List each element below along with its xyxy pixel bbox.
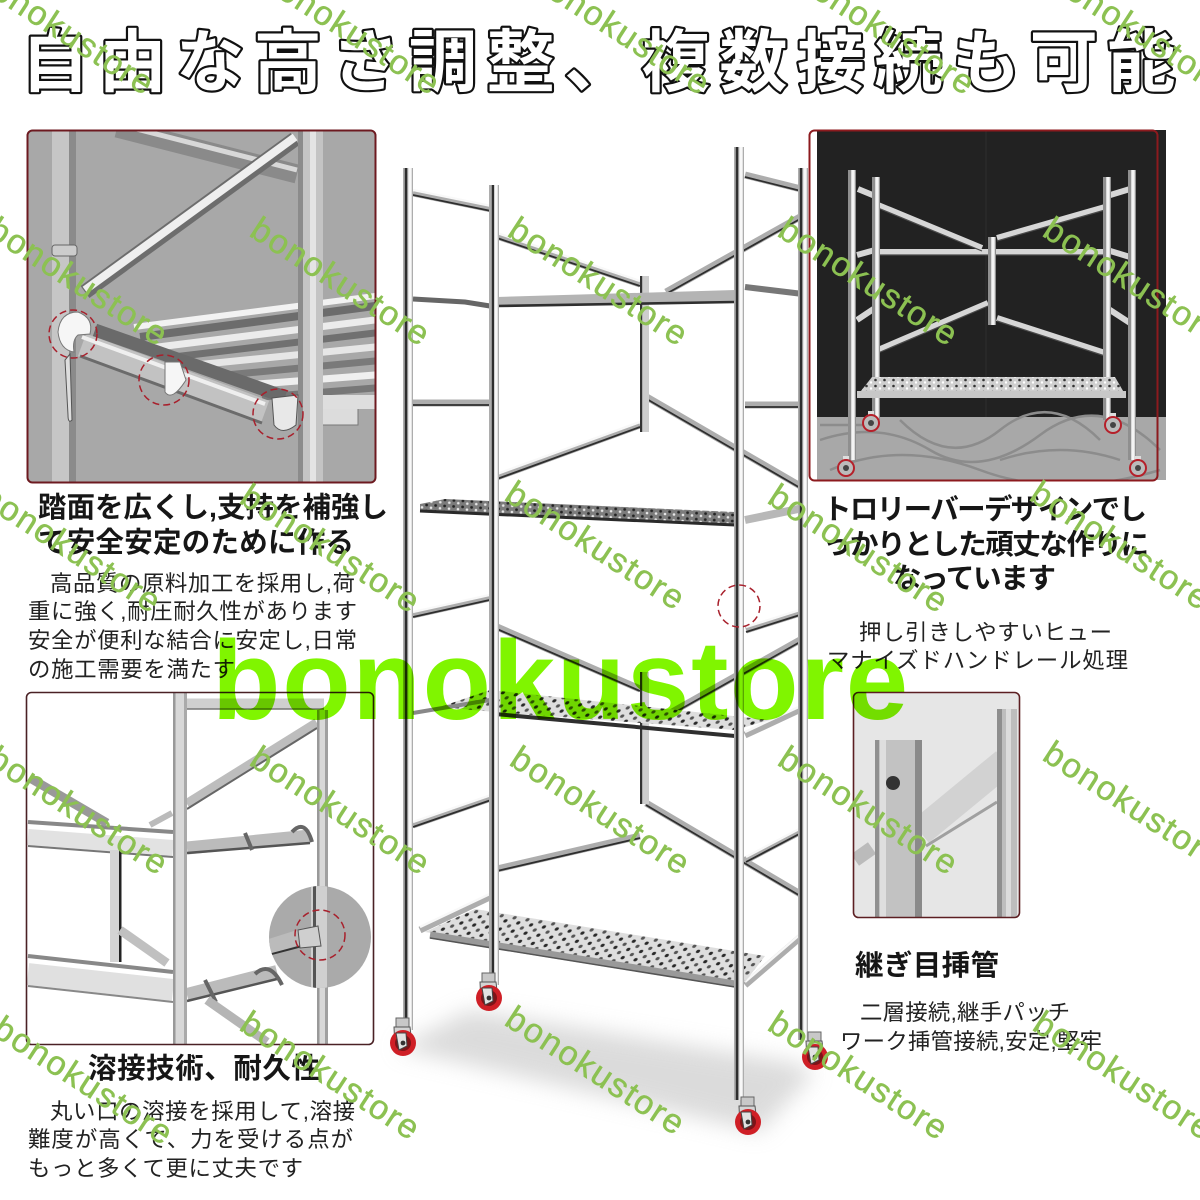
- heading: tread: て安全安定のために作る: [38, 527, 354, 559]
- platform: [857, 377, 1126, 398]
- lower shelf: [28, 956, 282, 1002]
- repeated watermarks: bonokustore: [499, 474, 691, 618]
- short post and braces: [30, 723, 317, 1042]
- large watermark: bonokustore: [212, 618, 908, 743]
- main scaffold illustration: [390, 147, 828, 1135]
- center post: [640, 276, 649, 804]
- dashed highlight circles: [49, 310, 303, 439]
- left post: [52, 130, 77, 482]
- heading: tread: 踏面を広くし,支持を補強し: [38, 492, 388, 524]
- shelf slats: [134, 296, 375, 425]
- heading: trolley bar: っかりとした頑丈な作りに: [823, 529, 1149, 561]
- left stub: [855, 848, 872, 860]
- repeated watermarks: bonokustore: [499, 999, 691, 1143]
- text block: tread description: 重に強く,耐圧耐久性があります: [28, 599, 357, 624]
- dashed marker circle: [718, 585, 760, 627]
- casters: [390, 973, 828, 1135]
- text block: joint insert description: [840, 1000, 1102, 1054]
- text block: trolley bar description: [827, 620, 1128, 673]
- text block: welding description: [28, 1099, 355, 1181]
- heading: tread: [38, 492, 388, 559]
- text block: tread description: 高品質の原料加工を採用し,荷: [50, 571, 355, 596]
- heading: trolley bar: [823, 493, 1149, 595]
- text block: trolley bar description: 押し引きしやすいヒュー: [859, 620, 1112, 645]
- floor shadow: [396, 1010, 815, 1132]
- support bar: [80, 330, 285, 423]
- shelf 1: [413, 287, 803, 306]
- repeated watermarks: bonokustore: [244, 739, 436, 883]
- cross rails and braces: [413, 175, 805, 985]
- repeated watermarks: bonokustore: [504, 739, 696, 883]
- right tube: [997, 709, 1017, 917]
- shelf 3: [413, 690, 770, 736]
- left tube with hole: [875, 740, 922, 917]
- text block: welding description: もっと多くて更に丈夫です: [28, 1156, 303, 1181]
- repeated watermarks: bonokustore: [244, 210, 436, 354]
- diagonal strut: [920, 762, 1005, 846]
- panel: joint insert photo: [853, 692, 1020, 918]
- heading: welding: 溶接技術、耐久性: [88, 1053, 320, 1085]
- panel: wide tread close-up: [27, 124, 376, 482]
- repeated watermarks: bonokustore: [502, 210, 694, 354]
- wood floor: [817, 412, 1166, 485]
- panel: trolley bar photo: [810, 130, 1166, 485]
- heading: trolley bar: なっています: [893, 563, 1056, 595]
- repeated watermarks: bonokustore: [772, 739, 964, 883]
- repeated watermarks: bonokustore: [234, 1004, 426, 1148]
- panel: welding close-up: [26, 692, 374, 1044]
- frame uprights: [852, 170, 1133, 460]
- text block: tread description: 安全が便利な結合に安定し,日常: [28, 628, 357, 653]
- text block: joint insert description: ワーク挿管接続,安定,堅牢: [840, 1029, 1102, 1054]
- inset detail circle: [268, 880, 371, 990]
- text block: tread description: の施工需要を満たす: [28, 657, 235, 682]
- upper rail: [117, 128, 297, 174]
- title: 自由な高さ調整、複数接続も可能: [21, 25, 1185, 101]
- casters: [838, 411, 1146, 476]
- hooks: [58, 312, 298, 430]
- upper shelf: [28, 822, 312, 857]
- repeated watermarks: bonokustore: [772, 210, 964, 354]
- right post: [298, 130, 323, 482]
- text block: trolley bar description: マナイズドハンドレール処理: [827, 648, 1128, 673]
- diagonal brace: [85, 137, 295, 292]
- repeated watermarks: bonokustore: [234, 477, 426, 621]
- frame rails: [857, 189, 1130, 356]
- shelf 4: [425, 909, 765, 987]
- text block: joint insert description: 二層接続,継手パッチ: [860, 1000, 1070, 1025]
- text block: tread description: [28, 571, 357, 682]
- uprights: [406, 147, 805, 1100]
- vertical posts: [173, 692, 328, 1044]
- heading: trolley bar: トロリーバーデザインでし: [823, 493, 1147, 526]
- text block: welding description: 難度が高くて、力を受ける点が: [28, 1127, 353, 1152]
- text block: welding description: 丸い口の溶接を採用して,溶接: [50, 1099, 355, 1124]
- shelf 2: [420, 499, 803, 525]
- heading: joint insert: 継ぎ目挿管: [855, 950, 999, 982]
- repeated watermarks: bonokustore: [762, 1004, 954, 1148]
- repeated watermarks: bonokustore: [762, 477, 954, 621]
